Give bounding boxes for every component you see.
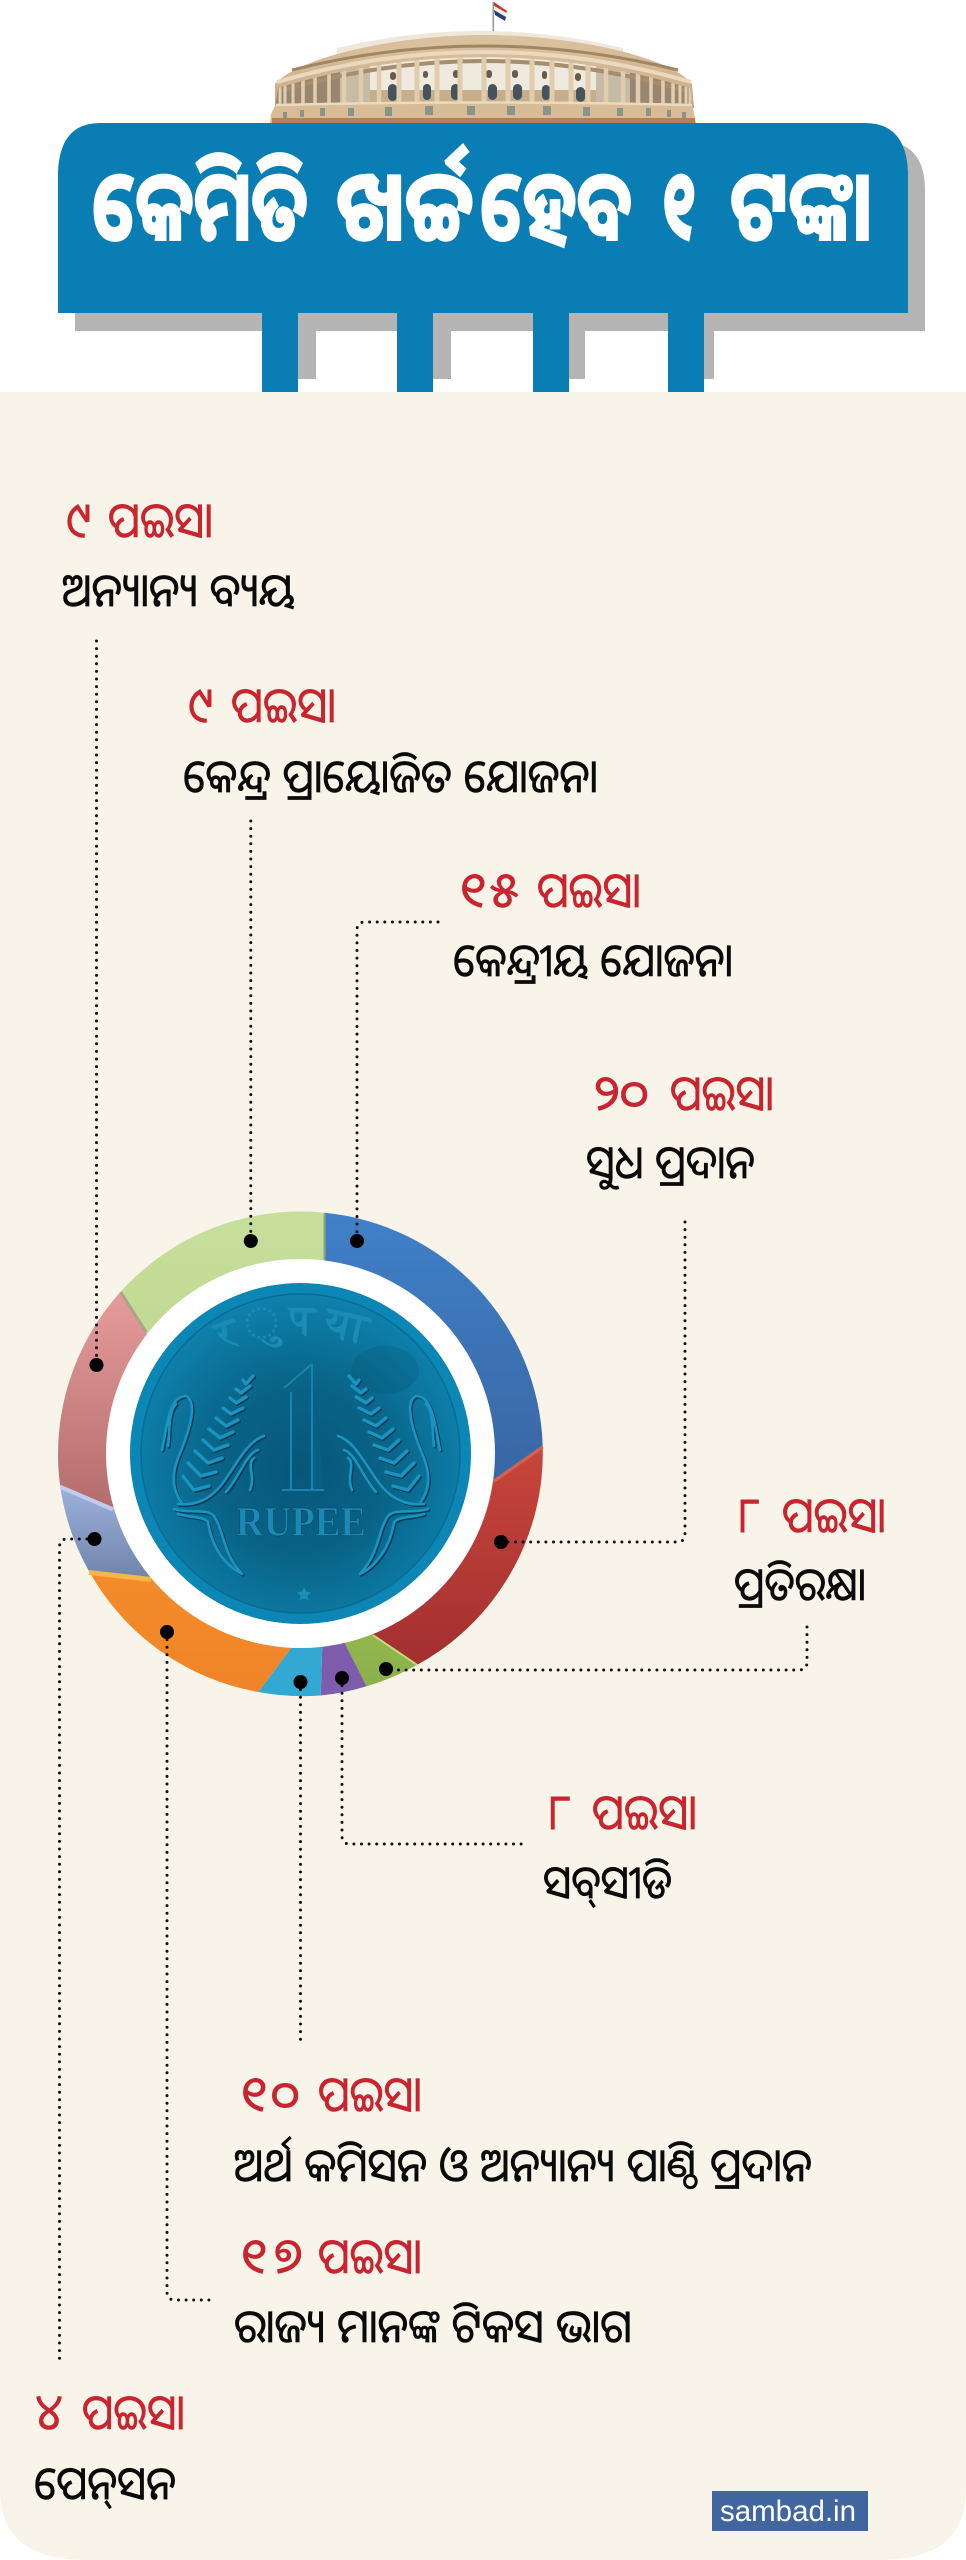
segment: purple subsidy [300,1453,367,1696]
leader: subsidy [335,1671,525,1844]
title: ହେବ [480,151,632,261]
coin [130,1283,471,1624]
segment: periwinkle pension [60,1453,300,1578]
segment: blue central schemes [300,1213,543,1480]
title: ଟଙ୍କା [730,151,872,261]
label: other expenditure: ୯ [66,494,91,548]
label: central schemes [453,864,733,986]
label: centrally sponsored schemes [183,679,598,802]
coin numeral 1 [282,1364,324,1490]
label: finance commission: ପଇସା [318,2068,422,2122]
label: centrally sponsored schemes: ପଇସା [231,679,336,733]
donut chart: expenditure share [58,1212,543,1696]
title: ଖର୍ଚ୍ଚ [336,144,474,261]
label: states share of taxes: ରାଜ୍ୟ ମାନଙ୍କ ଟିକସ ଭାଗ [234,2300,632,2352]
leader: pension [60,1532,102,2364]
label: interest payment: ୨୦ [593,1067,648,1121]
label: other expenditure: ଅନ୍ୟାନ୍ୟ ବ୍ୟୟ [62,564,295,616]
label: central schemes: ୧୫ [459,864,518,918]
label: interest payment: ସୁଧ ପ୍ରଦାନ [586,1136,755,1190]
segment: cyan finance commission [258,1453,322,1696]
label: interest payment [586,1067,774,1190]
label: finance commission [234,2068,812,2191]
label: defence: ୮ [737,1489,760,1543]
label: states share of taxes [234,2230,632,2352]
title [92,144,872,261]
label: states share of taxes: ୧୭ [240,2230,302,2284]
icon: flag [492,2,507,36]
label: states share of taxes: ପଇସା [318,2230,422,2284]
label: subsidy [543,1786,697,1908]
leader: centrally sponsored [244,821,258,1248]
title board [58,123,908,392]
coin wheat right [338,1376,441,1575]
coin text RUPEE: RUPEE [236,1500,366,1546]
label: pension: ପଇସା [82,2386,185,2440]
label: other expenditure: ପଇସା [108,494,213,548]
label: pension: ୪ [36,2386,62,2440]
label: central schemes: କେନ୍ଦ୍ରୀୟ ଯୋଜନା [453,934,733,986]
label: subsidy: ୮ [547,1786,571,1840]
coin text Hindi arc: र ु प या [212,1308,372,1348]
label: centrally sponsored schemes: ୯ [188,679,213,733]
leader: interest [494,1222,685,1549]
label: centrally sponsored schemes: କେନ୍ଦ୍ର ପ୍ରାୟୋଜିତ ଯୋଜନା [183,750,598,802]
coin star [297,1587,311,1601]
label: subsidy: ସବ୍‌ସୀଡି [543,1856,672,1908]
leader: other expenditure [90,641,104,1372]
label: defence: ପ୍ରତିରକ୍ଷା [734,1558,866,1610]
board legs [262,313,704,392]
label: central schemes: ପଇସା [537,864,641,918]
leader: defence [379,1627,807,1676]
label: interest payment: ପଇସା [670,1067,774,1121]
label: finance commission: ୧୦ [240,2068,299,2122]
source badge: sambad.in [720,2495,856,2528]
parliament building [270,2,696,123]
leader: finance commission [294,1675,308,2042]
label: pension: ପେନ୍‌ସନ [34,2457,176,2509]
segment: pink other expenditure [58,1292,300,1507]
leader: states share [160,1625,213,2300]
label: defence: ପଇସା [782,1489,886,1543]
leader: central schemes [350,922,438,1248]
label: finance commission: ଅର୍ଥ କମିସନ ଓ ଅନ୍ୟାନ୍ୟ ପାଣ୍ଠି ପ୍ରଦାନ [234,2136,812,2191]
label: other expenditure [62,494,295,616]
title: ୧ [662,151,696,261]
segment: orange states share [89,1453,300,1692]
title: କେମିତି [92,151,308,261]
coin wheat left [162,1376,265,1575]
segment: light green defence [300,1453,417,1686]
label: defence [734,1489,886,1610]
segment: red interest [300,1445,543,1665]
label: pension [34,2386,185,2509]
label: subsidy: ପଇସା [592,1786,697,1840]
segment: green centrally sponsored [120,1212,324,1453]
board shadow [75,141,925,379]
